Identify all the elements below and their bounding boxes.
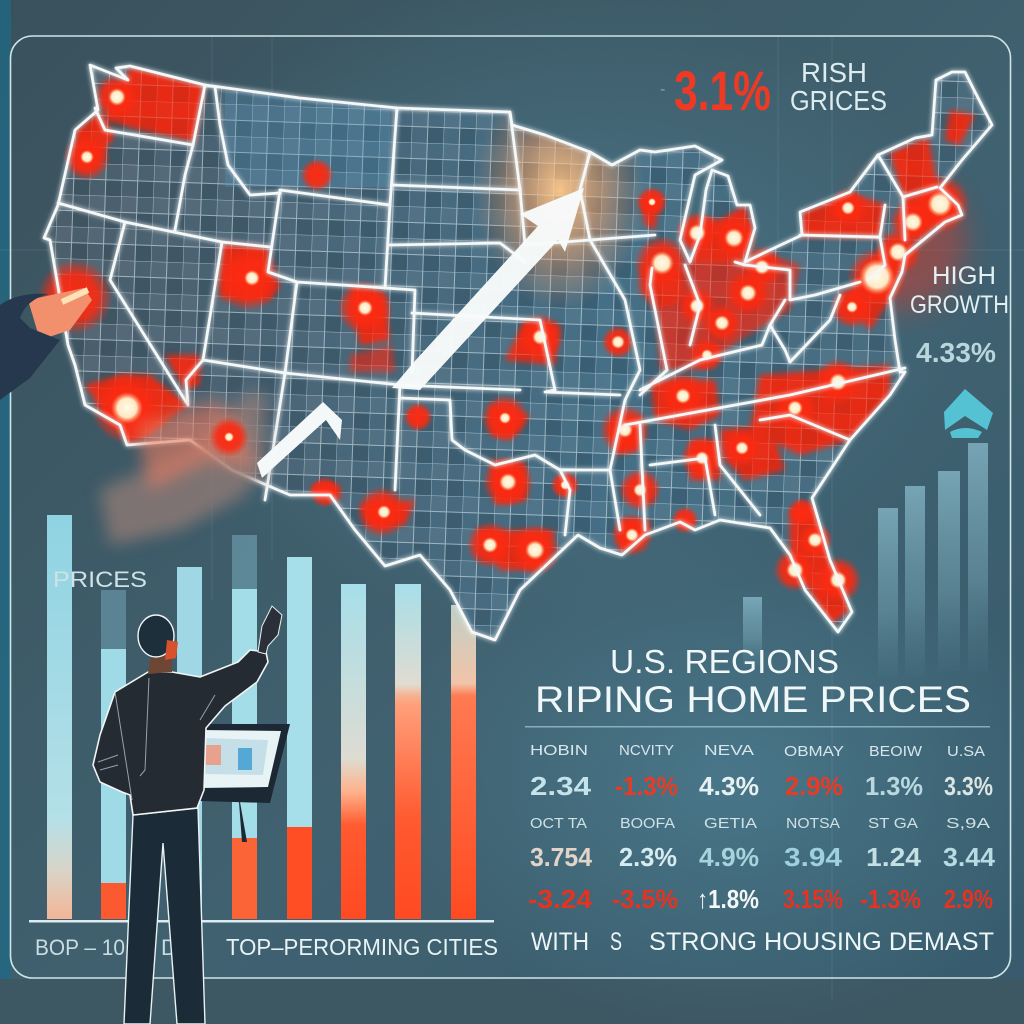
bar 5 [287,557,312,919]
row 1 values [530,771,993,801]
callout: rish grices: RISH [801,57,867,88]
row 2 values [530,842,996,872]
row 3 values: 3.15% [783,884,843,914]
label: prices: PRICES [53,567,147,592]
row 1 values: 4.3% [699,771,759,801]
row 2 labels [530,815,990,832]
bar chart: top-performing cities [29,515,498,960]
row 2 labels: NOTSA [786,815,840,832]
row 1 labels: NCVITY [619,742,674,759]
red glow outside east coast [845,170,965,310]
label: bottom fragment: D [161,935,177,960]
bar 3 [177,567,202,919]
title: U.S. REGIONS [610,643,839,680]
row 1 labels: BEOIW [869,743,923,760]
legs [124,808,205,1024]
jacket and arm [93,650,268,815]
blue tint over montana [225,92,390,187]
callout: high growth: GROWTH [910,291,1009,319]
divider [525,726,990,728]
bar 8 [451,605,476,919]
bar 2 [101,590,126,919]
row 1 values: 2.34 [530,771,592,801]
footer line: strong housing demand: WITH [531,928,589,956]
big growth arrow [392,188,584,390]
row 2 values: 1.24 [866,842,922,872]
headline number: - [660,81,665,98]
row 1 values: 2.9% [785,771,843,801]
row 3 values: -3.5% [612,884,678,914]
footer line: strong housing demand: STRONG HOUSING DEMAST [649,928,994,956]
right background bars [743,443,988,678]
grid over red [30,50,1000,650]
left hand with sleeve [0,288,92,400]
warm glow near arrow [479,114,641,304]
red state fills [75,66,975,625]
row 2 labels: ST GA [868,815,918,832]
row 2 values: 3.94 [784,842,843,872]
bar 6 [341,584,366,919]
callout: high growth: HIGH [932,262,996,290]
row 2 values: 3.44 [943,842,996,872]
title [535,643,971,720]
row 2 labels: OCT TA [530,815,587,832]
row 3 values [528,884,993,914]
row 2 values: 4.9% [699,842,759,872]
row 1 values: 3.3% [944,771,993,801]
bar 7 [395,584,421,919]
row 1 labels: U.SA [947,743,985,760]
row 2 values: 2.3% [619,842,677,872]
footer line: strong housing demand: S [610,928,622,956]
tablet [200,724,290,842]
head [138,615,178,660]
row 2 labels: BOOFA [620,815,675,832]
row 2 labels: S,9A [946,815,990,832]
growth number: 4.33% [916,337,996,368]
icon: teal house arrow [944,389,993,438]
row 1 labels: NEVA [704,742,754,759]
glowing hotspots [37,73,970,604]
label: bottom left: BOP – 10 [35,935,125,960]
row 3 values: -1.3% [860,884,921,914]
row 3 values: ↑1.8% [697,884,759,914]
row 1 labels: HOBIN [530,742,588,759]
row 1 labels: OBMAY [784,743,844,760]
row 2 values: 3.754 [530,842,593,872]
callout: rish grices [790,57,887,116]
row 1 labels [530,742,985,760]
bar 1 [47,515,72,919]
row 1 values: 1.3% [865,771,923,801]
state borders [44,65,992,640]
row 2 labels: GETIA [704,815,757,832]
callout: high growth [910,262,1009,319]
lower hand smear [100,392,266,545]
person pointing at chart [93,606,290,1024]
row 3 values: -3.24 [528,884,593,914]
map fill and grid [30,50,1000,650]
jacket seams [98,678,215,800]
label: top-performing cities: TOP–PERORMING CITIES [226,934,498,960]
bar 4 [232,535,257,919]
headline number: 3.1% [674,59,771,122]
small white arrow [257,402,342,478]
title: RIPING HOME PRICES [535,679,971,720]
row 1 values: -1.3% [615,771,678,801]
data table [528,742,996,914]
neck [148,655,172,674]
hand [258,606,282,654]
headline number [660,59,771,122]
chart baseline [29,920,494,922]
map of United States [30,50,1000,650]
row 3 values: 2.9% [944,884,993,914]
callout: rish grices: GRICES [790,85,887,116]
